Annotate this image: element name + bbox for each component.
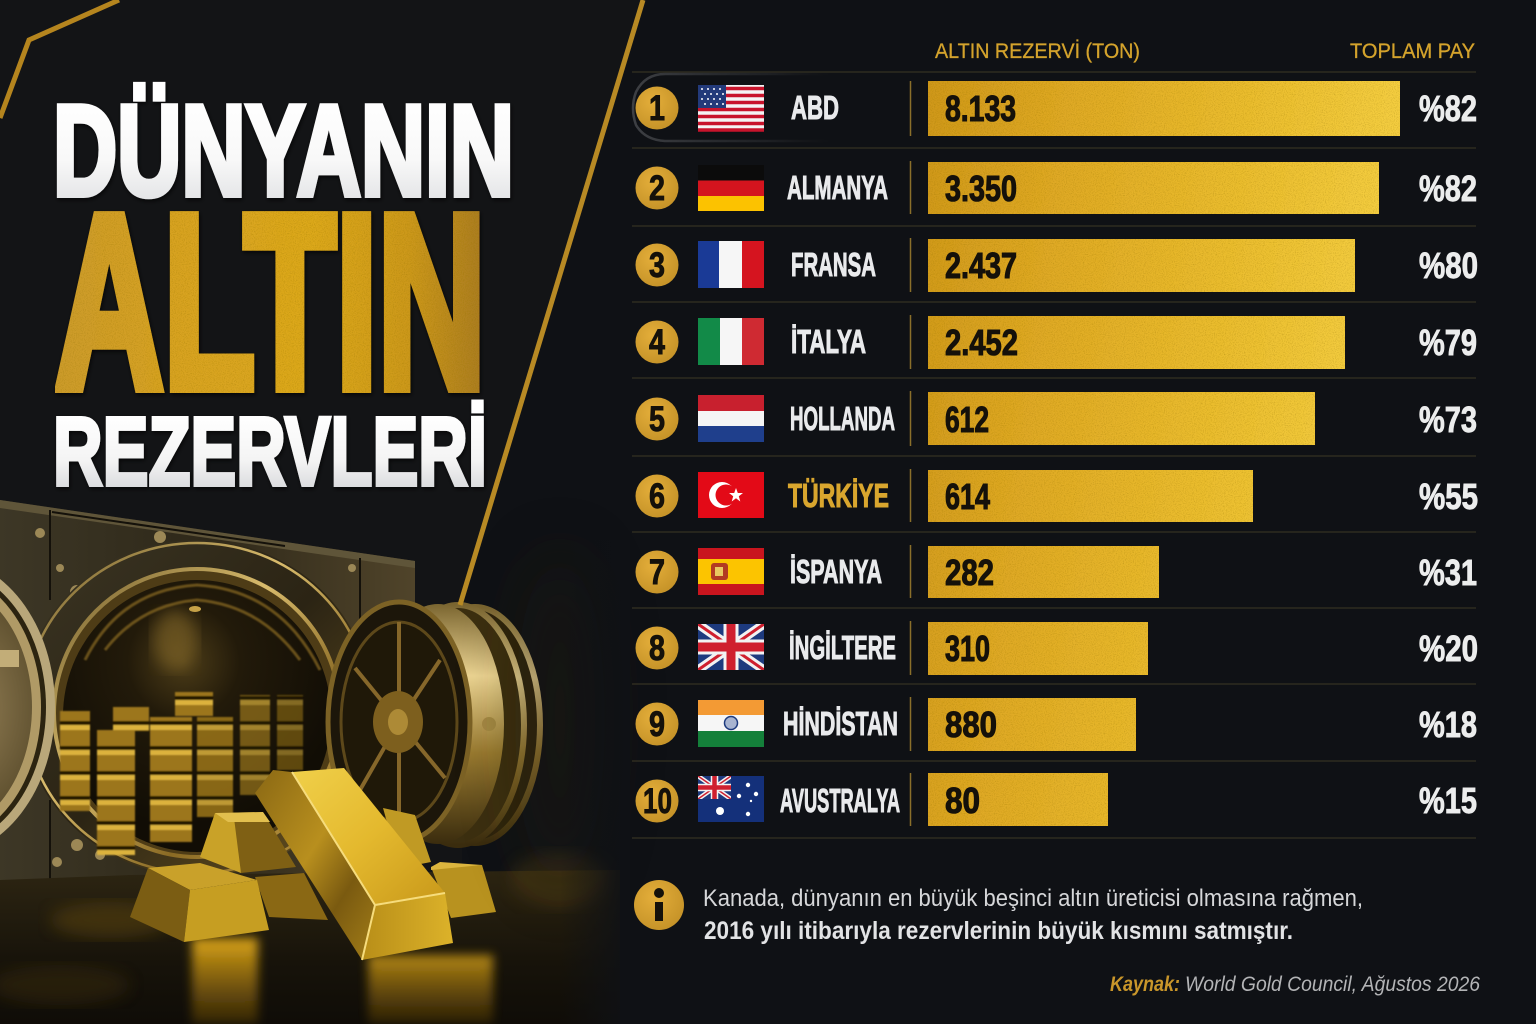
country name: İSPANYA xyxy=(790,553,882,590)
stacked gold bars inside vault xyxy=(60,692,303,855)
value: 282 xyxy=(945,552,994,593)
row 9: HİNDİSTAN xyxy=(636,697,1477,751)
value: 2.452 xyxy=(945,322,1018,363)
country name: AVUSTRALYA xyxy=(780,782,900,819)
country name: ABD xyxy=(791,89,839,126)
rank badge: 2 xyxy=(649,169,665,208)
rank badge: 3 xyxy=(649,246,665,285)
left title panel background xyxy=(0,0,642,1024)
separator xyxy=(910,391,912,446)
title line: ALTIN: ALTIN xyxy=(55,164,486,440)
bar xyxy=(928,81,1400,136)
separator xyxy=(910,697,912,751)
flag: Netherlands xyxy=(698,395,764,442)
right bar xyxy=(431,862,496,918)
rank badge xyxy=(636,398,678,440)
share: %80 xyxy=(1419,245,1478,286)
rank badge: 1 xyxy=(649,89,665,128)
top left gold accent line xyxy=(0,0,119,118)
country name: HOLLANDA xyxy=(790,400,895,437)
row 10: AVUSTRALYA xyxy=(636,773,1477,826)
separator xyxy=(910,773,912,826)
rank badge xyxy=(636,550,678,594)
upper left bar xyxy=(200,812,296,873)
share: %82 xyxy=(1419,168,1477,209)
title line: DÜNYANIN: DÜNYANIN xyxy=(53,79,514,223)
value: 880 xyxy=(945,704,997,745)
note text line 2: 2016 yılı itibarıyla rezervlerinin büyük kısmını satmıştır. xyxy=(704,917,1293,945)
rank badge xyxy=(636,474,678,518)
bar xyxy=(928,239,1355,292)
row highlight xyxy=(633,74,830,141)
vault circular opening xyxy=(22,540,372,876)
share: %18 xyxy=(1419,704,1477,745)
separator xyxy=(910,621,912,675)
value: 612 xyxy=(945,399,989,440)
value: 8.133 xyxy=(945,88,1016,129)
rank badge: 6 xyxy=(649,477,665,516)
rank badge: 5 xyxy=(649,400,665,439)
separator xyxy=(910,81,912,136)
rank badge xyxy=(636,166,678,210)
back right bar xyxy=(383,808,431,868)
row 5: HOLLANDA xyxy=(636,391,1477,446)
share: %55 xyxy=(1419,476,1478,517)
rank badge xyxy=(636,702,678,746)
flag: Italy xyxy=(698,318,764,365)
value: 310 xyxy=(945,628,990,669)
note text line 1: Kanada, dünyanın en büyük beşinci altın üreticisi olmasına rağmen, xyxy=(703,885,1363,912)
header: toplam pay: TOPLAM PAY xyxy=(1350,40,1475,63)
column headers xyxy=(935,40,1475,63)
rank badge: 7 xyxy=(649,553,665,592)
main front bar xyxy=(255,768,453,960)
country name: FRANSA xyxy=(791,246,876,283)
rank badge xyxy=(636,626,678,670)
bar xyxy=(928,316,1345,369)
source label: Kaynak: xyxy=(1110,973,1180,996)
rank badge: 4 xyxy=(649,323,665,362)
separator xyxy=(910,545,912,598)
separator xyxy=(910,238,912,292)
share: %73 xyxy=(1419,399,1477,440)
row 1: ABD xyxy=(633,74,1477,141)
row 4: İTALYA xyxy=(636,315,1477,369)
flag: India xyxy=(698,700,764,747)
bar xyxy=(928,470,1253,522)
share: %82 xyxy=(1419,88,1477,129)
row 3: FRANSA xyxy=(636,238,1478,292)
info note xyxy=(634,880,1363,945)
share: %31 xyxy=(1419,552,1477,593)
separator xyxy=(910,315,912,369)
rank badge xyxy=(636,320,678,364)
share: %20 xyxy=(1419,628,1478,669)
header: altın rezervi: ALTIN REZERVİ (TON) xyxy=(935,40,1140,63)
flag: France xyxy=(698,241,764,288)
flag: United Kingdom xyxy=(698,624,764,670)
lower left bar xyxy=(130,863,269,942)
rank badge: 10 xyxy=(643,782,672,821)
icon: info xyxy=(634,880,684,930)
bar xyxy=(928,773,1108,826)
flag: Turkey xyxy=(698,472,764,518)
rank badge xyxy=(636,86,678,130)
vault and gold bars illustration xyxy=(0,500,630,1024)
rank badge: 8 xyxy=(649,629,665,668)
country name: HİNDİSTAN xyxy=(783,705,898,742)
reflective floor xyxy=(0,852,620,1024)
rank badge: 9 xyxy=(649,705,665,744)
flag: Spain xyxy=(698,548,764,595)
title xyxy=(53,79,514,506)
country name: İTALYA xyxy=(791,323,866,360)
vault door right xyxy=(328,602,540,845)
middle lower bar xyxy=(255,873,328,920)
bar xyxy=(928,546,1159,598)
country name: ALMANYA xyxy=(787,169,888,206)
source text: World Gold Council, Ağustos 2026 xyxy=(1185,973,1480,996)
value: 3.350 xyxy=(945,168,1017,209)
title line: REZERVLERİ: REZERVLERİ xyxy=(53,397,487,506)
diagonal gold divider line xyxy=(460,0,643,605)
share: %15 xyxy=(1419,780,1477,821)
country name: TÜRKİYE xyxy=(788,477,889,514)
source xyxy=(1110,973,1480,996)
bar xyxy=(928,162,1379,214)
bar xyxy=(928,622,1148,675)
value: 80 xyxy=(945,780,980,821)
flag: Germany xyxy=(698,165,764,211)
bar xyxy=(928,698,1136,751)
row 7: İSPANYA xyxy=(636,545,1477,598)
value: 2.437 xyxy=(945,245,1017,286)
flag: USA xyxy=(698,85,764,131)
separator xyxy=(910,161,912,214)
dark haze right of the door xyxy=(515,550,605,890)
country name: İNGİLTERE xyxy=(789,629,896,666)
flag: Australia xyxy=(698,776,764,822)
separator xyxy=(910,469,912,522)
row 8: İNGİLTERE xyxy=(636,621,1478,675)
gold bar pile xyxy=(130,768,496,960)
rank badge xyxy=(636,244,678,286)
vault wall xyxy=(0,500,415,880)
bar xyxy=(928,392,1315,445)
share: %79 xyxy=(1419,322,1477,363)
row 6: TÜRKİYE xyxy=(636,469,1478,522)
value: 614 xyxy=(945,476,990,517)
row 2: ALMANYA xyxy=(636,161,1477,214)
rank badge xyxy=(636,780,678,822)
vault door left xyxy=(0,557,55,857)
